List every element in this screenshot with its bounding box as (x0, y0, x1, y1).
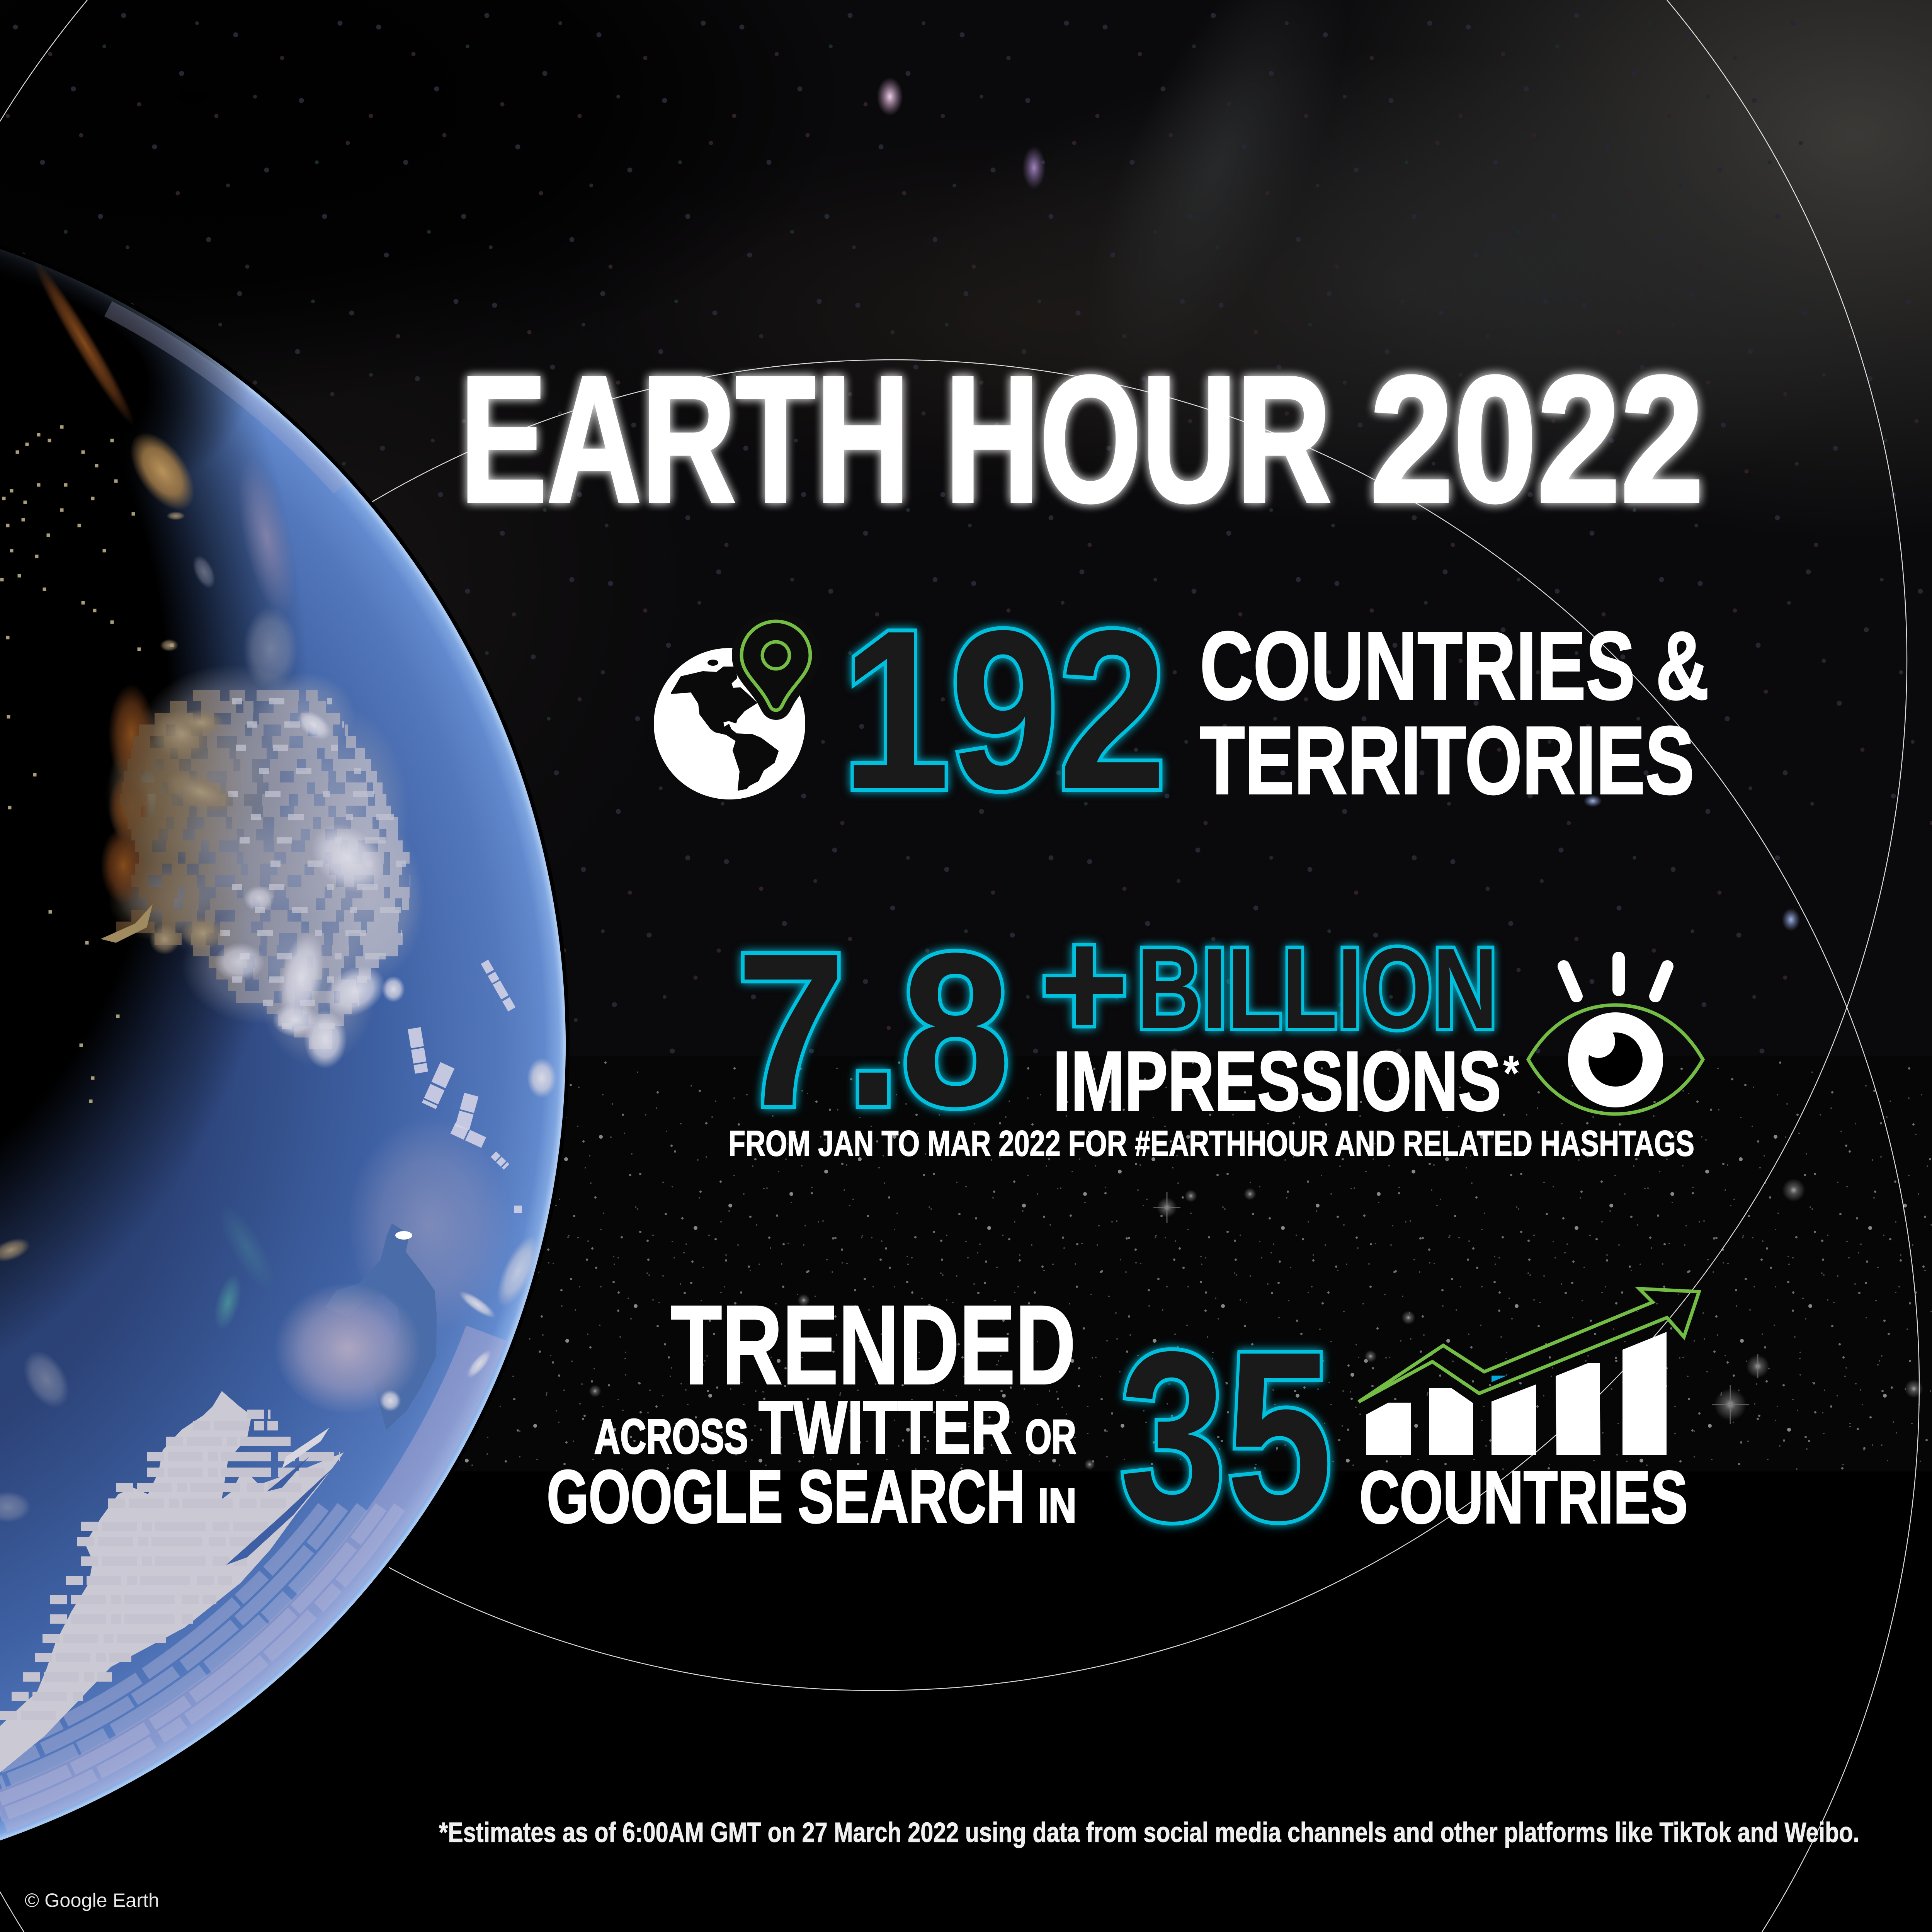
stat number: 192: 192 (842, 583, 1167, 836)
text block: trended across twitter or google search: IN (1038, 1478, 1077, 1533)
upper limb lavender band (108, 309, 340, 488)
label: countries and territories: COUNTRIES & (1200, 612, 1709, 719)
stat unit: plus billion: + (1039, 897, 1129, 1070)
credit: google earth: © Google Earth (25, 1889, 159, 1911)
large southern cloud (0, 1343, 400, 1816)
text block: trended across twitter or google search: OR (1025, 1410, 1076, 1464)
title: 2022 (1370, 338, 1704, 539)
text block: trended across twitter or google search: GOOGLE SEARCH (547, 1455, 1025, 1539)
text block: trended across twitter or google search (547, 1282, 1077, 1539)
pale desert land patch (209, 1117, 510, 1430)
icon: rising bar chart with arrow (1359, 1289, 1699, 1455)
sunset land glow (0, 255, 220, 1266)
main cloud cluster base (100, 607, 425, 1066)
lavender cloud streak (227, 453, 306, 621)
icon: eye (1528, 958, 1703, 1114)
label: impressions: IMPRESSIONS (1053, 1034, 1501, 1128)
stat number: 35: 35 (1119, 1301, 1333, 1570)
title (460, 338, 1704, 539)
stat unit: plus billion (1039, 897, 1498, 1070)
pink limb band (0, 1333, 486, 1812)
title: EARTH (460, 338, 910, 539)
city lights (2, 427, 172, 1101)
stat unit: plus billion: BILLION (1137, 924, 1498, 1052)
label: countries: COUNTRIES (1359, 1456, 1688, 1539)
label: impressions: * (1503, 1045, 1519, 1101)
text block: trended across twitter or google search: TRENDED (671, 1282, 1076, 1408)
text block: trended across twitter or google search: TWITTER (759, 1386, 1012, 1469)
earth globe (0, 249, 570, 1841)
mottled cloud texture (116, 696, 410, 1043)
small clouds near limb (379, 962, 556, 1412)
label: countries and territories: TERRITORIES (1200, 706, 1694, 814)
icon: globe with map pin (654, 621, 810, 799)
night side shadow (0, 19, 309, 1410)
bright cloud patches (149, 705, 405, 1069)
limb highlight (0, 204, 565, 1886)
text block: trended across twitter or google search: ACROSS (594, 1409, 748, 1464)
label: countries and territories (1200, 612, 1709, 814)
stat number: 7.8: 7.8 (736, 908, 1010, 1151)
background: space with milky way haze and stars (5, 0, 1932, 1470)
lighter cloud texture (220, 701, 406, 1026)
title: HOUR (945, 338, 1331, 539)
